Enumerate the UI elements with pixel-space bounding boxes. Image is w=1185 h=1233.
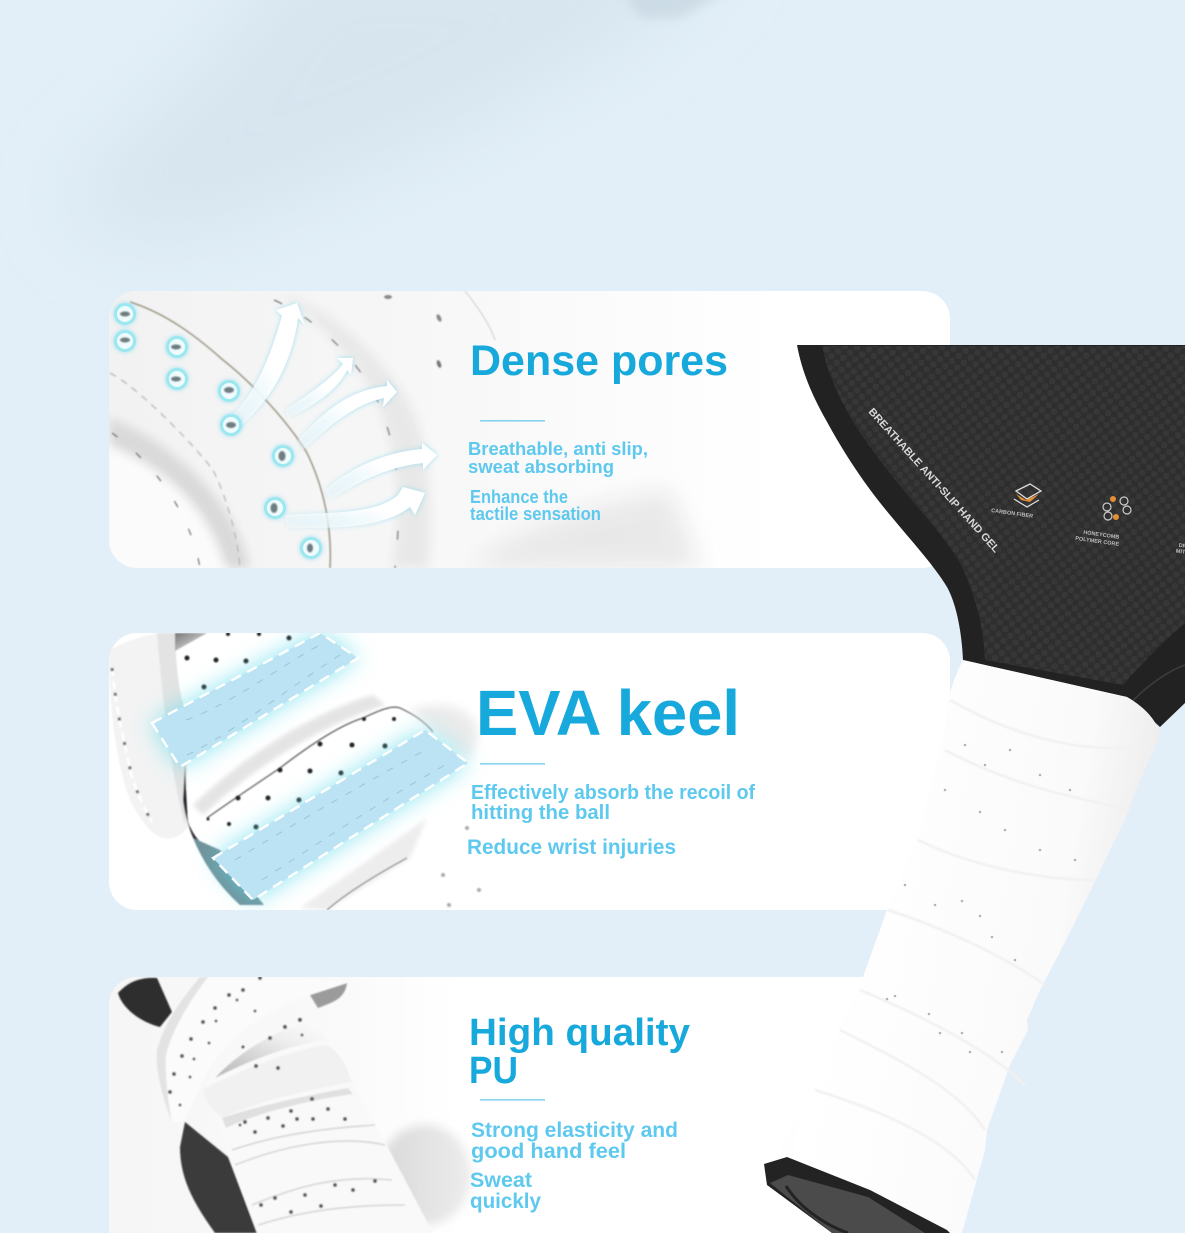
grip close-up photo with keel strips bbox=[109, 632, 481, 910]
paddle bbox=[764, 345, 1185, 1233]
text: absorb recoil: hitting the ball bbox=[471, 801, 610, 824]
label: breathable anti-slip hand gel: BREATHABLE ANTI-SLIP HAND GEL bbox=[866, 406, 1002, 556]
top shadow swoosh bbox=[126, 0, 715, 213]
text: sweat quickly: quickly bbox=[470, 1190, 541, 1213]
heading: high quality PU: PU bbox=[469, 1050, 518, 1092]
heading: EVA keel: EVA keel bbox=[476, 677, 740, 749]
grip close-up photo with pores bbox=[109, 291, 700, 568]
icon: honeycomb polymer core: HONEYCOMB bbox=[1083, 530, 1120, 541]
icon: honeycomb polymer core: POLYMER CORE bbox=[1075, 536, 1120, 548]
text: tactile: Enhance the bbox=[470, 487, 568, 507]
divider line bbox=[480, 1099, 545, 1101]
text: sweat quickly: Sweat bbox=[470, 1169, 532, 1192]
icon: carbon fiber layers bbox=[991, 484, 1041, 520]
text: elasticity: Strong elasticity and bbox=[471, 1119, 678, 1142]
text: elasticity: good hand feel bbox=[471, 1140, 626, 1163]
grip butt cap bbox=[764, 1157, 950, 1233]
text: wrist injuries: Reduce wrist injuries bbox=[467, 836, 676, 859]
divider line bbox=[480, 420, 545, 422]
heading: dense pores: Dense pores bbox=[470, 337, 728, 385]
panel: EVA keel bbox=[109, 632, 950, 910]
arrows: airflow bbox=[222, 303, 437, 528]
keel strip: upper bbox=[152, 633, 358, 767]
text: tactile: tactile sensation bbox=[470, 504, 601, 524]
panel: high quality PU bbox=[109, 976, 950, 1233]
icon: carbon fiber layers: CARBON FIBER bbox=[991, 508, 1033, 520]
heading: high quality PU: High quality bbox=[469, 1012, 690, 1054]
paddle head bbox=[797, 345, 1185, 727]
text: breathable: Breathable, anti slip, bbox=[468, 438, 648, 459]
pore holes bbox=[116, 304, 320, 558]
grip wrap photo bbox=[109, 976, 471, 1233]
text: breathable: sweat absorbing bbox=[468, 456, 614, 477]
keel strip: lower bbox=[213, 730, 468, 900]
text: absorb recoil: Effectively absorb the recoil of bbox=[471, 781, 755, 804]
icon: honeycomb polymer core bbox=[1075, 496, 1131, 548]
grip handle bbox=[780, 660, 1160, 1233]
panel: dense pores bbox=[109, 291, 950, 568]
divider line bbox=[480, 763, 545, 765]
